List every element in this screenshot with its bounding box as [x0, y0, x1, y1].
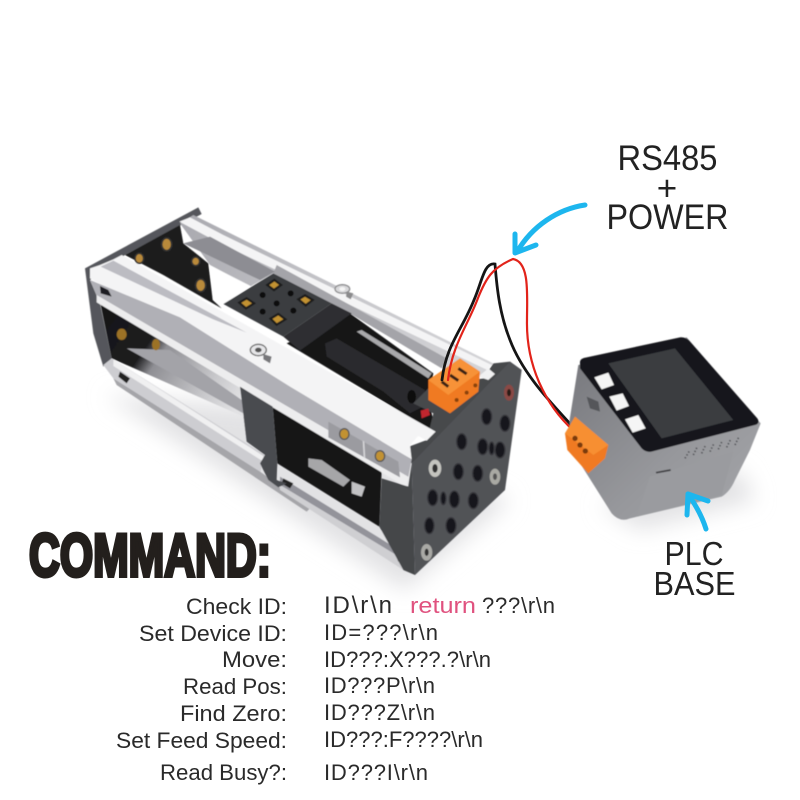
arrow: RS485 + power callout [515, 205, 585, 253]
command strings: ID\r\n [324, 592, 392, 619]
side port [587, 397, 600, 412]
command names [116, 594, 287, 785]
command names: Find Zero: [180, 701, 287, 726]
brass inserts left window [117, 329, 160, 350]
command strings: ???\r\n [482, 593, 555, 618]
command strings: ID???:X???.?\r\n [324, 647, 491, 672]
command strings: ID???P\r\n [324, 673, 435, 698]
wires between module and PLC base [442, 259, 574, 431]
lower front rail right [278, 467, 404, 570]
carriage top plate with mounting holes [223, 273, 332, 337]
command strings [324, 592, 555, 785]
side face of end plate [379, 463, 415, 575]
command strings: ID???Z\r\n [324, 700, 435, 725]
screen [608, 348, 733, 438]
end plate face [412, 362, 522, 575]
base seam shading [637, 452, 733, 517]
orange terminal connector [428, 358, 480, 413]
lower front rail left [103, 358, 310, 512]
command names: Set Feed Speed: [116, 728, 287, 753]
label: RS485 + POWER: + [657, 169, 677, 208]
command strings: ID???I\r\n [324, 760, 428, 785]
top of end plate [400, 362, 522, 463]
second front rail [97, 295, 408, 487]
label: PLC BASE [654, 535, 736, 602]
device top face [580, 337, 759, 452]
dark corner slot [100, 286, 112, 297]
command strings: ID???:F????\r\n [324, 727, 483, 752]
bolt on front rail [250, 344, 272, 363]
command names: Check ID: [186, 594, 287, 619]
command strings: ID=???\r\n [324, 620, 438, 645]
command names: Set Device ID: [139, 621, 287, 646]
front top rail [90, 255, 436, 477]
label: PLC BASE: PLC [664, 535, 724, 572]
rear rail white strip [179, 217, 492, 370]
command names: Read Pos: [183, 674, 287, 699]
end plate mounting holes [425, 409, 510, 534]
rear rail end notch [478, 368, 495, 380]
red wire [448, 259, 574, 431]
orange connector [565, 417, 608, 473]
lower dark window with motor [273, 407, 382, 527]
left side window [100, 302, 247, 442]
linear module photo illustration [85, 207, 522, 575]
buttons [594, 373, 646, 433]
speaker grille [685, 437, 739, 458]
rear top rail area [180, 215, 493, 377]
label: RS485 + POWER: POWER [606, 198, 728, 237]
arrow: PLC base callout [687, 494, 708, 529]
PLC base device [565, 337, 761, 520]
white gap behind carriage [209, 265, 251, 304]
carriage side plate [240, 387, 287, 487]
brass side plates [328, 422, 400, 477]
soft floor shadows [105, 395, 755, 590]
bolt on rear rail [335, 285, 353, 299]
left lower rail slot [118, 372, 130, 383]
label: RS485 + POWER: RS485 [618, 139, 718, 178]
inner channel shading [183, 237, 275, 280]
dark rear motor mount [125, 225, 222, 308]
heading: COMMAND: COMMAND: [29, 522, 271, 589]
command names: Move: [222, 647, 287, 672]
black wire [442, 264, 574, 428]
brass inserts rear [135, 238, 206, 292]
rear rail shaded band [273, 265, 447, 368]
side slot [656, 470, 671, 473]
command names: Read Busy?: [160, 760, 287, 785]
label: RS485 + POWER [606, 139, 728, 237]
corner screws [421, 385, 514, 561]
left window rail streak [127, 348, 243, 413]
label: PLC BASE: BASE [654, 565, 736, 602]
status LED [421, 409, 430, 418]
rear end frame [85, 207, 202, 367]
carriage side [283, 303, 352, 351]
device body [569, 337, 761, 520]
command strings: return [410, 593, 476, 618]
motor section [287, 313, 437, 433]
